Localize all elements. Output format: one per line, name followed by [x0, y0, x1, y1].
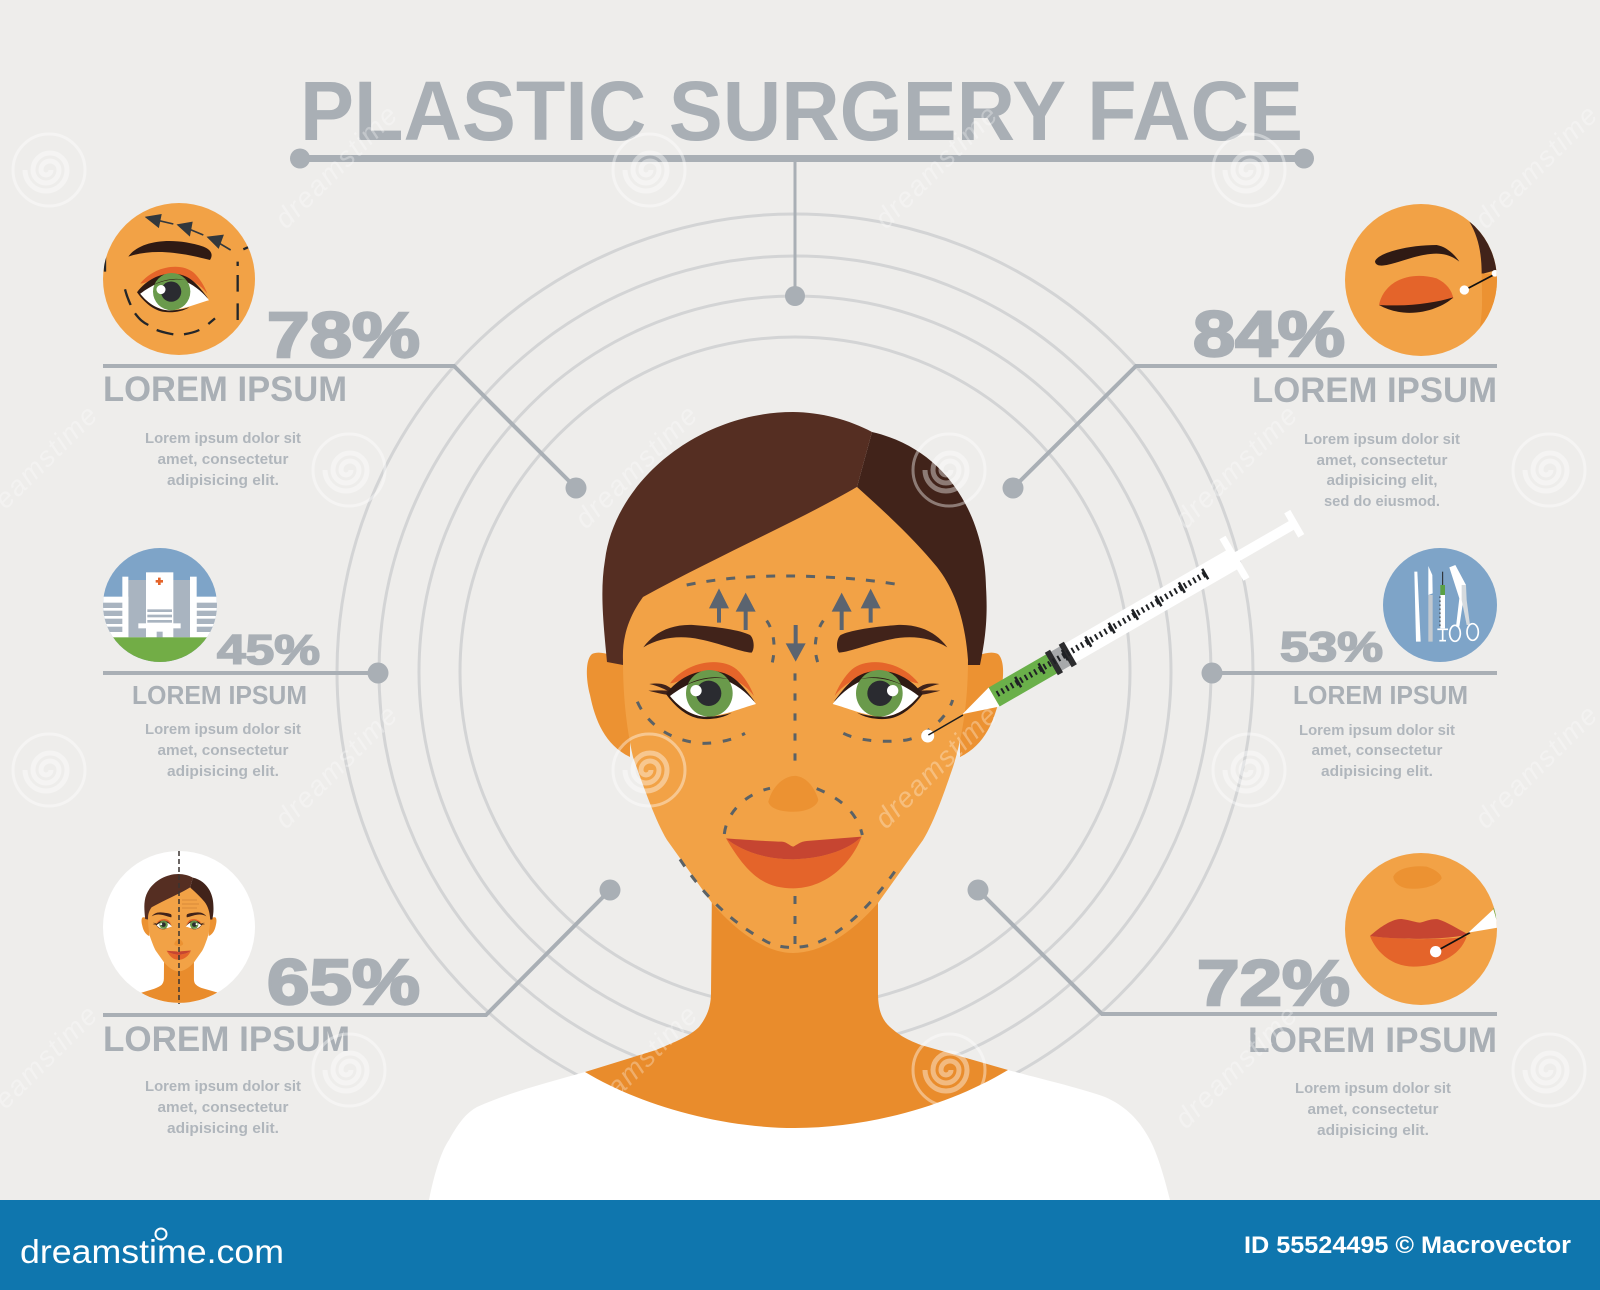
leader dot: [1002, 478, 1024, 498]
nose: [768, 776, 818, 812]
leader line: [978, 890, 1497, 1014]
panel: 84 percent: [1002, 204, 1498, 510]
icon: closed eye injection: [1345, 204, 1498, 356]
watermark text: dreamstime: [868, 698, 1004, 834]
body text: adipisicing elit.: [167, 472, 279, 489]
hair front: [602, 412, 872, 665]
watermark spirals: [13, 134, 1585, 1106]
body text: Lorem ipsum dolor sit: [1295, 1080, 1451, 1097]
watermark text: dreamstime: [568, 998, 704, 1134]
right brow: [837, 625, 947, 653]
face skin: [623, 487, 968, 953]
lift arrow 1: [709, 588, 729, 623]
body text: Lorem ipsum dolor sit: [1299, 722, 1455, 739]
body text: amet, consectetur: [158, 451, 289, 468]
body text: adipisicing elit.: [167, 1120, 279, 1137]
shirt: [429, 1070, 1170, 1200]
right eye: [833, 662, 940, 719]
panel: 72 percent: [968, 853, 1500, 1139]
panel: 65 percent: [103, 851, 620, 1137]
percentage: 65%: [267, 946, 420, 1018]
percentage: 45%: [217, 626, 320, 673]
left eye: [648, 662, 756, 719]
down arrow: [786, 625, 806, 662]
icon: surgical tools: [1383, 548, 1497, 662]
body text: Lorem ipsum dolor sit: [145, 1078, 301, 1095]
body text: amet, consectetur: [158, 742, 289, 759]
title rule with connector: [290, 148, 1314, 306]
concentric rings: [337, 214, 1253, 1130]
percentage: 72%: [1197, 947, 1350, 1019]
lower lip: [726, 837, 862, 888]
neck: [585, 880, 1008, 1128]
footer band: [0, 1200, 1600, 1290]
icon: lip injection: [1345, 853, 1500, 1005]
body text: amet, consectetur: [158, 1099, 289, 1116]
chin dashes: [790, 896, 799, 947]
body text: [1299, 722, 1455, 780]
syringe: [916, 501, 1309, 756]
leader line: [1212, 671, 1497, 675]
body text: amet, consectetur: [1312, 742, 1443, 759]
icon: hospital: [103, 548, 217, 662]
left brow: [643, 625, 754, 653]
leader dot: [368, 662, 388, 684]
leader line: [103, 671, 378, 675]
leader dot: [600, 880, 620, 900]
body text: adipisicing elit.: [167, 763, 279, 780]
body text: sed do eiusmod.: [1324, 493, 1440, 510]
panel: 53 percent: [1202, 548, 1497, 780]
head: [585, 412, 1008, 1128]
heading: LOREM IPSUM: [1252, 371, 1497, 410]
leader line: [103, 366, 576, 488]
lift arrow 2: [736, 593, 756, 630]
body text: [1295, 1080, 1451, 1139]
forehead dashes: [687, 576, 895, 585]
footer logo spiral: [156, 1228, 166, 1240]
surgical markings upper face: [637, 576, 953, 763]
body text: adipisicing elit.: [1321, 763, 1433, 780]
body text: adipisicing elit.: [1317, 1122, 1429, 1139]
left under-eye dashes: [637, 702, 745, 743]
heading: LOREM IPSUM: [103, 1020, 350, 1059]
body text: [1304, 431, 1460, 510]
leader dot: [968, 880, 988, 900]
title: PLASTIC SURGERY FACE: [300, 64, 1303, 158]
body text: Lorem ipsum dolor sit: [145, 430, 301, 447]
nose and mouth dashes left: [724, 788, 770, 834]
icon: eye lift: [103, 203, 255, 355]
footer credit: ID 55524495 © Macrovector: [1244, 1232, 1571, 1259]
heading: LOREM IPSUM: [103, 370, 347, 409]
watermark text: dreamstime: [868, 98, 1004, 234]
leader line: [103, 890, 610, 1015]
body text: Lorem ipsum dolor sit: [1304, 431, 1460, 448]
body text: adipisicing elit,: [1326, 472, 1438, 489]
midline dashes: [790, 673, 799, 763]
watermark text: dreamstime: [568, 398, 704, 534]
percentage: 78%: [267, 299, 420, 371]
watermark text: dreamstime: [268, 698, 404, 834]
body text: [145, 721, 301, 780]
heading: LOREM IPSUM: [1293, 680, 1468, 710]
body text: amet, consectetur: [1308, 1101, 1439, 1118]
right under-eye dashes: [843, 700, 953, 741]
lift arrow 4: [861, 589, 881, 623]
watermark text: dreamstime: [268, 98, 404, 234]
icon: before and after face: [103, 851, 255, 1004]
body text: Lorem ipsum dolor sit: [145, 721, 301, 738]
left ear: [587, 653, 630, 757]
watermark text: dreamstime: [1168, 398, 1304, 534]
nose and mouth dashes right: [817, 789, 862, 835]
leader dot: [566, 478, 586, 498]
footer logo: dreamstime.com: [20, 1233, 284, 1270]
watermark text: dreamstime: [1168, 998, 1304, 1134]
glabella dashes: [767, 621, 774, 665]
body text: [145, 430, 301, 489]
lips: [726, 837, 862, 888]
heading: LOREM IPSUM: [1248, 1021, 1497, 1060]
body text: [145, 1078, 301, 1137]
right ear: [960, 653, 1003, 757]
glabella dashes right: [815, 621, 823, 665]
hair back: [857, 432, 987, 665]
upper face features: [643, 625, 947, 719]
percentage: 53%: [1280, 623, 1383, 670]
upper lip: [726, 837, 862, 859]
lift arrow 3: [832, 593, 852, 630]
surgical markings lower face: [680, 788, 900, 947]
panel: 45 percent: [100, 545, 388, 780]
jaw dashes: [680, 859, 900, 947]
injection point: [921, 730, 934, 742]
leader dot: [1202, 662, 1222, 684]
heading: LOREM IPSUM: [132, 680, 307, 710]
percentage: 84%: [1193, 298, 1345, 370]
panel: 78 percent: [103, 203, 586, 498]
leader line: [1013, 366, 1497, 488]
body text: amet, consectetur: [1316, 452, 1448, 469]
